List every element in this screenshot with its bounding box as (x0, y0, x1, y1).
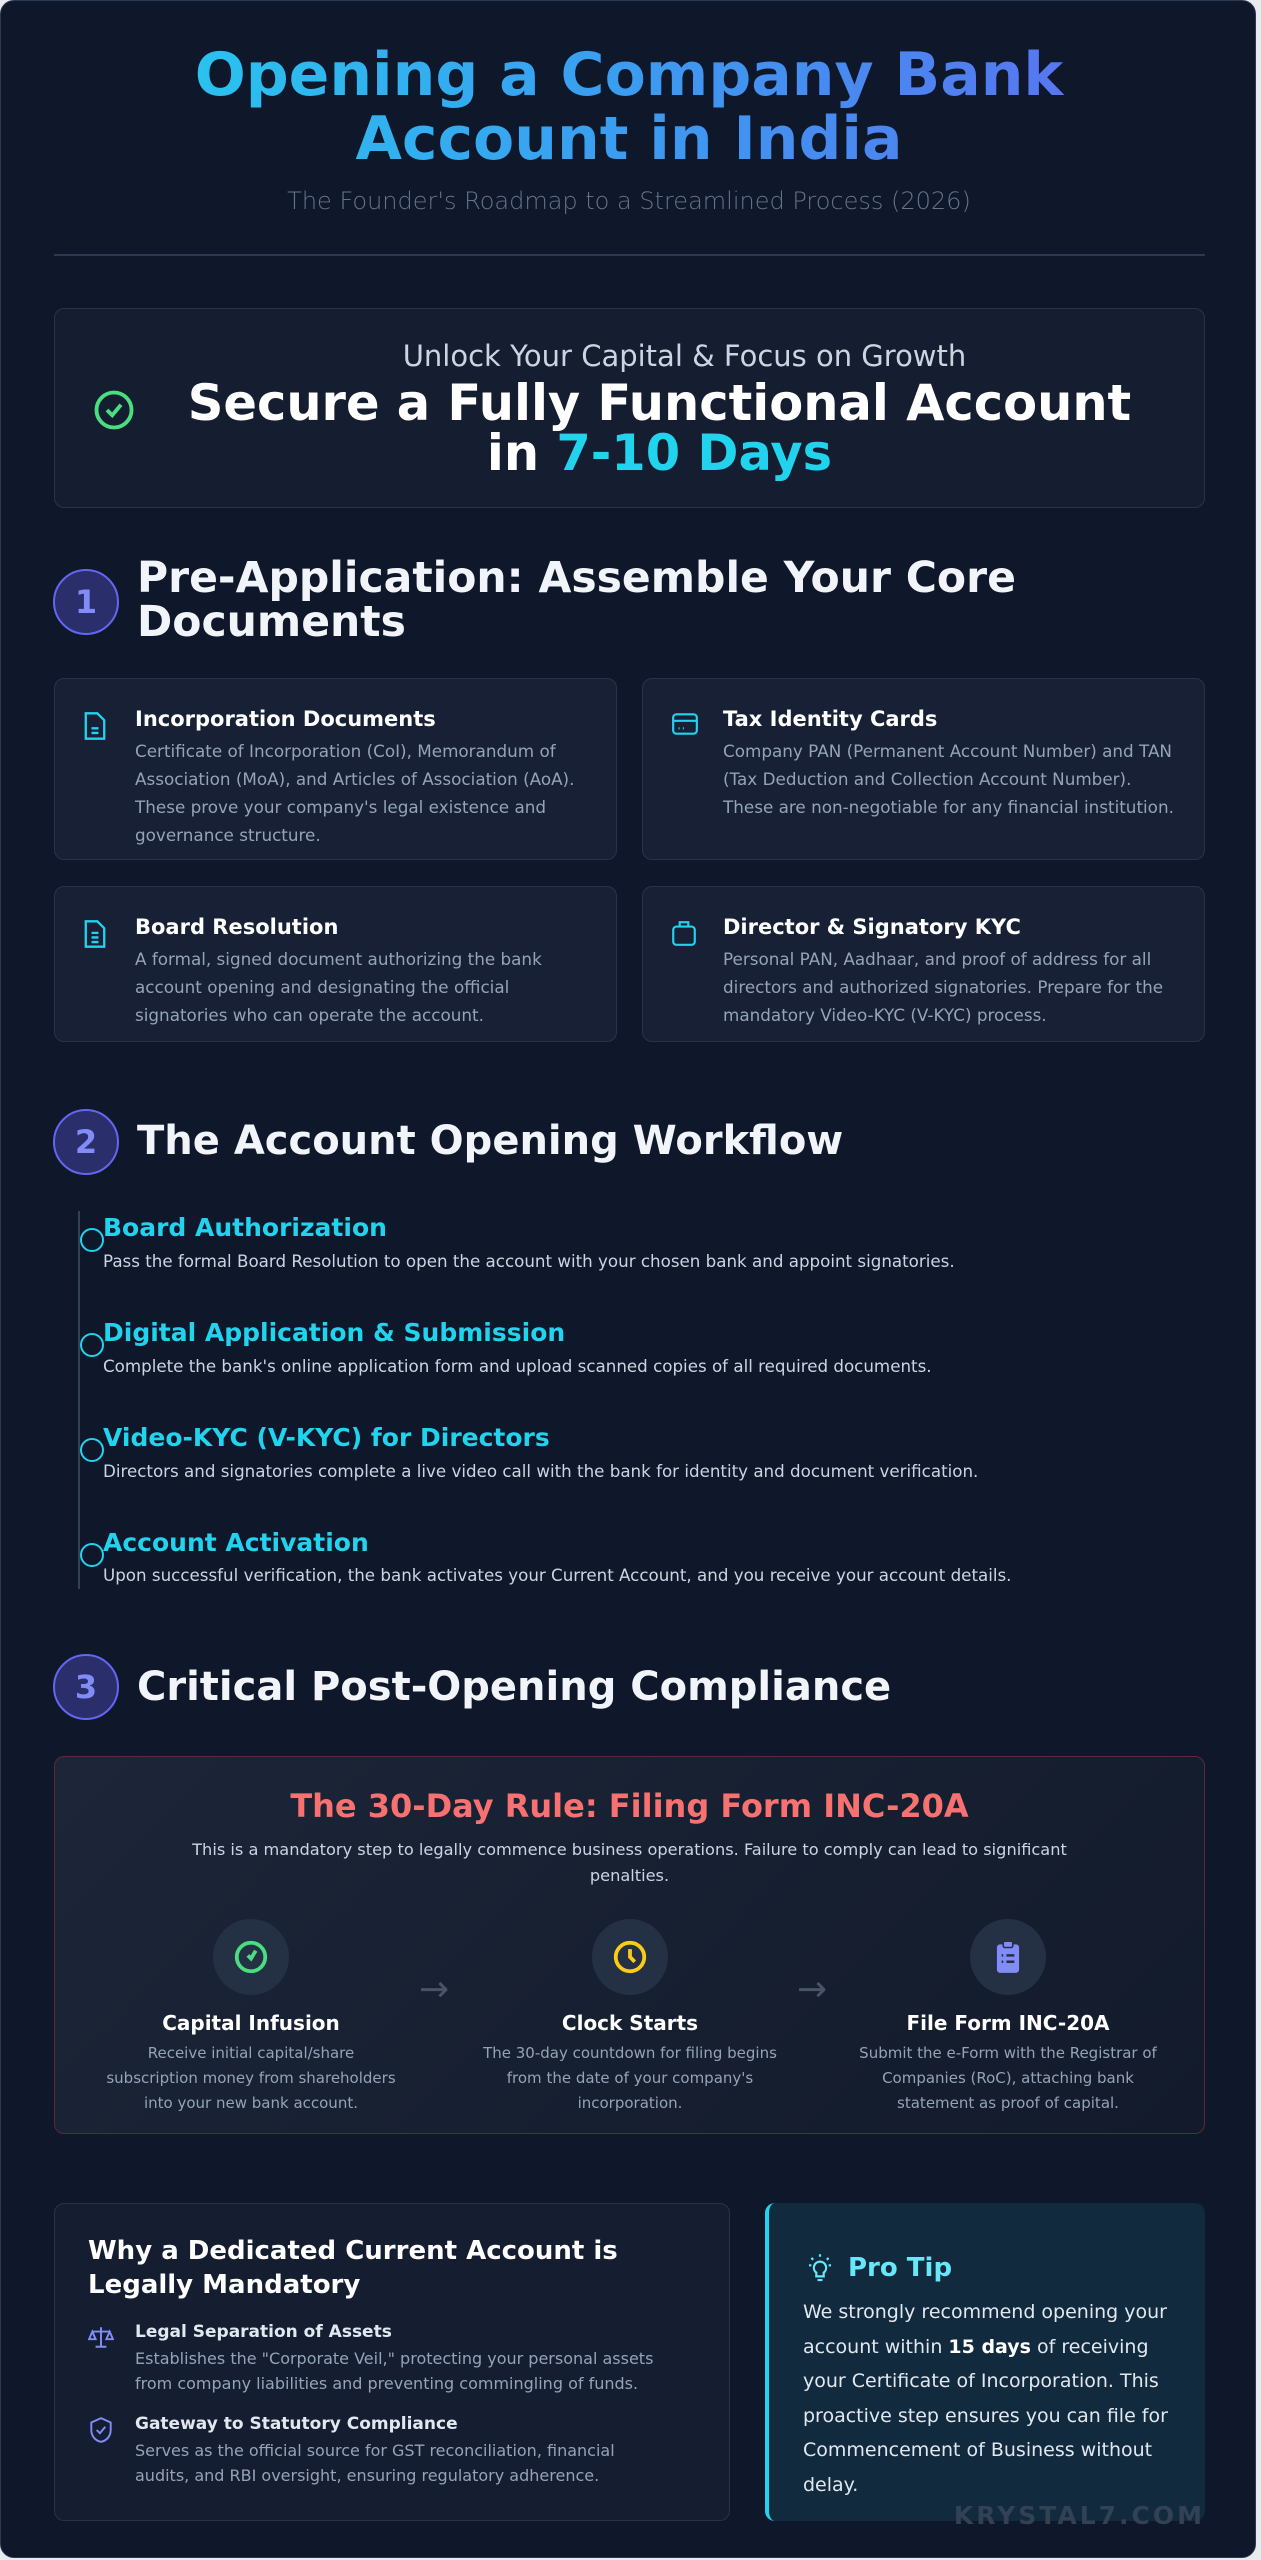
section 2 number: 2 (75, 1123, 97, 1161)
item: compliance (90, 2414, 615, 2485)
card: tax: Company PAN (Permanent Account Number) and TAN (Tax Deduction and Collection Account Number). These are non-negotiable for any financial institution. (723, 741, 1174, 817)
section 1 number: 1 (75, 583, 97, 621)
panel: why current account (54, 2203, 730, 2521)
step: file form: File Form INC-20A (906, 2011, 1110, 2035)
title: Account in India (355, 104, 902, 174)
section 3 heading: Critical Post-Opening Compliance (137, 1664, 891, 1710)
card: board: Board Resolution (135, 915, 338, 939)
hero text: Unlock Your Capital & Focus on Growth (403, 339, 966, 373)
card: board (54, 886, 617, 1042)
hero text (188, 339, 1131, 482)
item: compliance: Gateway to Statutory Compliance (135, 2414, 458, 2434)
title: Opening a Company Bank (195, 40, 1063, 110)
card: kyc: Personal PAN, Aadhaar, and proof of address for all directors and authorized signatories. Prepare for the mandatory Video-KYC (V-KYC) process. (723, 949, 1163, 1025)
timeline (78, 1211, 1012, 1589)
step 4 (80, 1528, 1012, 1585)
heading: Why a Dedicated Current Account is (88, 2236, 618, 2266)
timeline: Account Activation (103, 1528, 369, 1557)
section 3 number: 3 (75, 1668, 97, 1706)
card: incorporation (54, 678, 617, 860)
card: tax: Tax Identity Cards (723, 707, 937, 731)
icon: check (94, 390, 134, 430)
step: clock starts: Clock Starts (562, 2011, 698, 2035)
icon: capital (213, 1919, 289, 1995)
icon: clipboard (970, 1919, 1046, 1995)
timeline: Directors and signatories complete a live video call with the bank for identity and document verification. (103, 1461, 978, 1481)
section 1 heading: Pre-Application: Assemble Your Core (137, 554, 1016, 603)
section 3 number (53, 1654, 119, 1720)
step: capital infusion: Receive initial capital/share subscription money from shareholders into your new bank account. (106, 2044, 396, 2112)
icon: clock (592, 1919, 668, 1995)
heading: Legally Mandatory (88, 2270, 360, 2300)
heading: Pro Tip (848, 2253, 952, 2283)
arrow: → (419, 1969, 449, 2010)
text: We strongly recommend opening your account within 15 days of receiving your Certificate of Incorporation. This proactive step ensures you can file for Commencement of Business without delay. (803, 2301, 1168, 2496)
step: file form (859, 2011, 1158, 2112)
item: legal separation: Establishes the "Corporate Veil," protecting your personal assets (135, 2349, 653, 2368)
card: kyc (642, 886, 1205, 1042)
subtitle: The Founder's Roadmap to a Streamlined Process (2026) (287, 187, 971, 215)
step: capital infusion: Capital Infusion (162, 2011, 340, 2035)
card: incorporation: Certificate of Incorporation (CoI), Memorandum of Association (MoA), and Articles of Association (AoA). These prove your company's legal existence and governance structure. (135, 741, 574, 845)
hero text: in 7-10 Days (487, 424, 832, 482)
item: legal separation (88, 2322, 653, 2393)
panel title: The 30-Day Rule: Filing Form INC-20A (290, 1787, 969, 1825)
step 3 (80, 1423, 978, 1481)
timeline: Board Authorization (103, 1213, 387, 1242)
item: compliance: Serves as the official source for GST reconciliation, financial (135, 2441, 615, 2460)
heading (88, 2236, 618, 2300)
step: clock starts: The 30-day countdown for filing begins from the date of your company's incorporation. (483, 2044, 777, 2112)
icon: bulb (808, 2254, 832, 2282)
section 1 number (53, 569, 119, 635)
card: board: A formal, signed document authorizing the bank account opening and designating the official signatories who can operate the account. (135, 949, 542, 1025)
timeline: Upon successful verification, the bank activates your Current Account, and you receive your account details. (103, 1565, 1012, 1585)
INC-20A panel (54, 1756, 1205, 2134)
hero text: Secure a Fully Functional Account (188, 374, 1131, 432)
timeline: Digital Application & Submission (103, 1318, 565, 1347)
title (1, 43, 1257, 171)
card: tax (642, 678, 1205, 860)
step: file form: Submit the e-Form with the Registrar of Companies (RoC), attaching bank statement as proof of capital. (859, 2044, 1157, 2112)
timeline: Complete the bank's online application form and upload scanned copies of all required documents. (103, 1356, 932, 1376)
watermark: KRYSTAL7.COM (954, 2501, 1205, 2530)
item: compliance: audits, and RBI oversight, ensuring regulatory adherence. (135, 2466, 599, 2485)
step: clock starts (483, 2011, 777, 2112)
card: kyc: Director & Signatory KYC (723, 915, 1021, 939)
arrow: → (797, 1969, 827, 2010)
step 2 (80, 1318, 932, 1376)
section 1 heading (137, 554, 1016, 647)
section 2 number (53, 1109, 119, 1175)
item: legal separation: from company liabilities and preventing commingling of funds. (135, 2374, 638, 2393)
section 1 heading: Documents (137, 598, 406, 647)
item: legal separation: Legal Separation of Assets (135, 2322, 392, 2342)
timeline: Video-KYC (V-KYC) for Directors (103, 1423, 550, 1452)
step: capital infusion (106, 2011, 396, 2112)
panel subtitle: This is a mandatory step to legally commence business operations. Failure to comply can lead to significant penalties. (192, 1840, 1067, 1885)
section 2 heading: The Account Opening Workflow (137, 1118, 843, 1164)
step 1 (80, 1213, 955, 1271)
hero panel (54, 308, 1205, 508)
panel: pro tip (765, 2203, 1205, 2521)
card: incorporation: Incorporation Documents (135, 707, 436, 731)
timeline: Pass the formal Board Resolution to open the account with your chosen bank and appoint signatories. (103, 1251, 955, 1271)
